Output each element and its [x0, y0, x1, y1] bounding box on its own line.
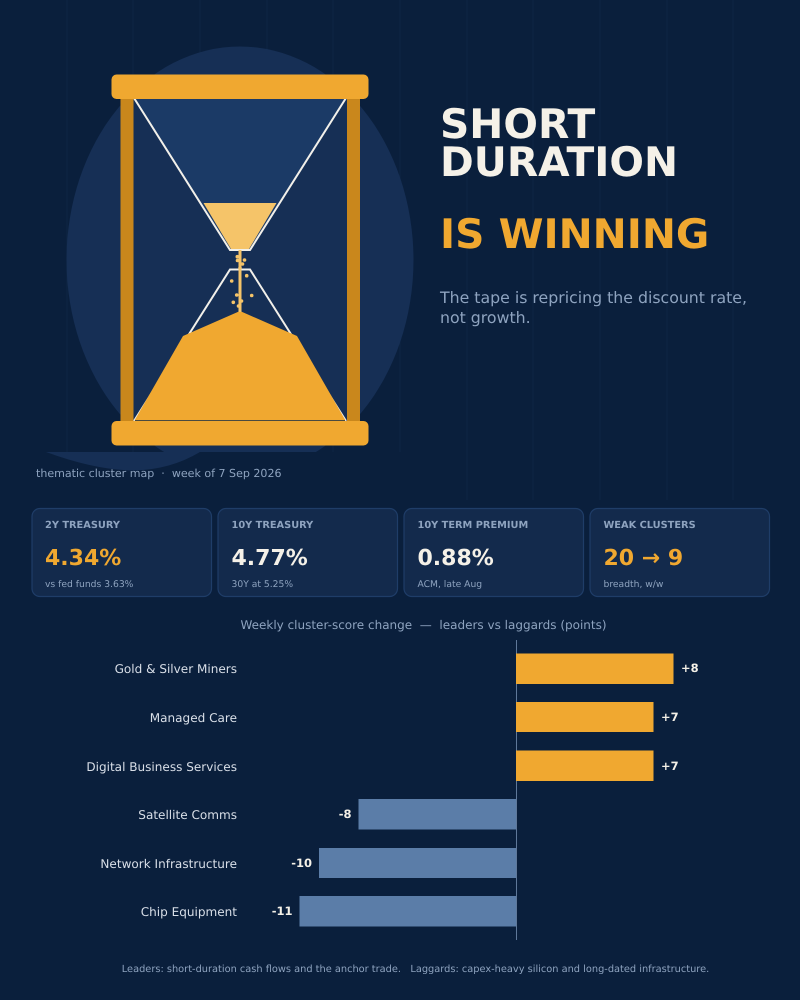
- bar: Network Infrastructure: Network Infrastructure: [100, 857, 237, 871]
- panel: 10Y term premium: 10Y TERM PREMIUM: [418, 520, 528, 531]
- bar: Managed Care: [150, 702, 679, 732]
- panel: 10Y term premium: 0.88%: [418, 546, 494, 571]
- bar: Chip Equipment: -11: [272, 904, 292, 918]
- subtitle: The tape is repricing the discount rate,: [439, 288, 747, 307]
- falling sand stream: [230, 250, 254, 312]
- bar chart: [86, 640, 699, 940]
- panel: 2Y treasury: 4.34%: [45, 546, 121, 571]
- panel: 10Y treasury: 30Y at 5.25%: [232, 579, 293, 590]
- title: [440, 100, 709, 258]
- panel: 10Y term premium: [404, 508, 584, 596]
- subtitle: [439, 288, 747, 327]
- title: DURATION: [440, 138, 678, 186]
- background ellipse: [46, 46, 414, 474]
- bar: Network Infrastructure: [100, 848, 516, 878]
- bar: Satellite Comms: -8: [339, 807, 352, 821]
- panel: weak clusters: 20 → 9: [604, 546, 683, 571]
- glass outline: [134, 98, 346, 421]
- footnote: Leaders: short-duration cash flows and the anchor trade. Laggards: capex-heavy silicon and long-dated infrastructure.: [122, 964, 709, 975]
- icon: hourglass: [112, 74, 368, 446]
- bar: Gold & Silver Miners: Gold & Silver Miners: [115, 662, 237, 676]
- panel: 2Y treasury: vs fed funds 3.63%: [45, 579, 134, 590]
- hourglass posts: [120, 96, 360, 426]
- bar: Network Infrastructure: -10: [291, 856, 312, 870]
- bottom cap: [112, 421, 368, 446]
- panel: 2Y treasury: [32, 508, 212, 596]
- title: IS WINNING: [440, 210, 709, 258]
- panel: 10Y treasury: 4.77%: [232, 546, 308, 571]
- title: SHORT: [440, 100, 595, 148]
- panel: 10Y term premium: ACM, late Aug: [418, 579, 482, 590]
- panel: weak clusters: breadth, w/w: [604, 579, 664, 590]
- bar: Digital Business Services: [86, 750, 679, 781]
- bar: Digital Business Services: Digital Business Services: [86, 760, 237, 774]
- bar: Satellite Comms: Satellite Comms: [138, 808, 237, 822]
- top cap: [112, 74, 368, 99]
- bar: Digital Business Services: +7: [661, 759, 679, 773]
- panel: weak clusters: [590, 508, 770, 596]
- bar: Chip Equipment: Chip Equipment: [141, 905, 237, 919]
- zero axis: [516, 640, 517, 940]
- panel: weak clusters: WEAK CLUSTERS: [604, 520, 696, 531]
- chart heading: Weekly cluster-score change — leaders vs laggards (points): [240, 618, 607, 632]
- panel: 2Y treasury: 2Y TREASURY: [45, 520, 121, 531]
- bar: Satellite Comms: [138, 799, 516, 830]
- upper glass: [134, 99, 346, 250]
- bar: Chip Equipment: [141, 896, 516, 926]
- panel: 10Y treasury: [218, 508, 398, 596]
- hourglass inner backing: [134, 99, 347, 421]
- panel: 10Y treasury: 10Y TREASURY: [232, 520, 314, 531]
- upper sand: [204, 203, 276, 249]
- sand base line: [135, 420, 345, 421]
- bar: Gold & Silver Miners: +8: [681, 661, 699, 675]
- dateline: thematic cluster map · week of 7 Sep 2026: [36, 467, 282, 480]
- bar: Managed Care: +7: [661, 710, 679, 724]
- lower sand pile: [134, 311, 346, 420]
- bar: Gold & Silver Miners: [115, 654, 699, 684]
- subtitle: not growth.: [440, 308, 531, 327]
- bar: Managed Care: Managed Care: [150, 711, 237, 725]
